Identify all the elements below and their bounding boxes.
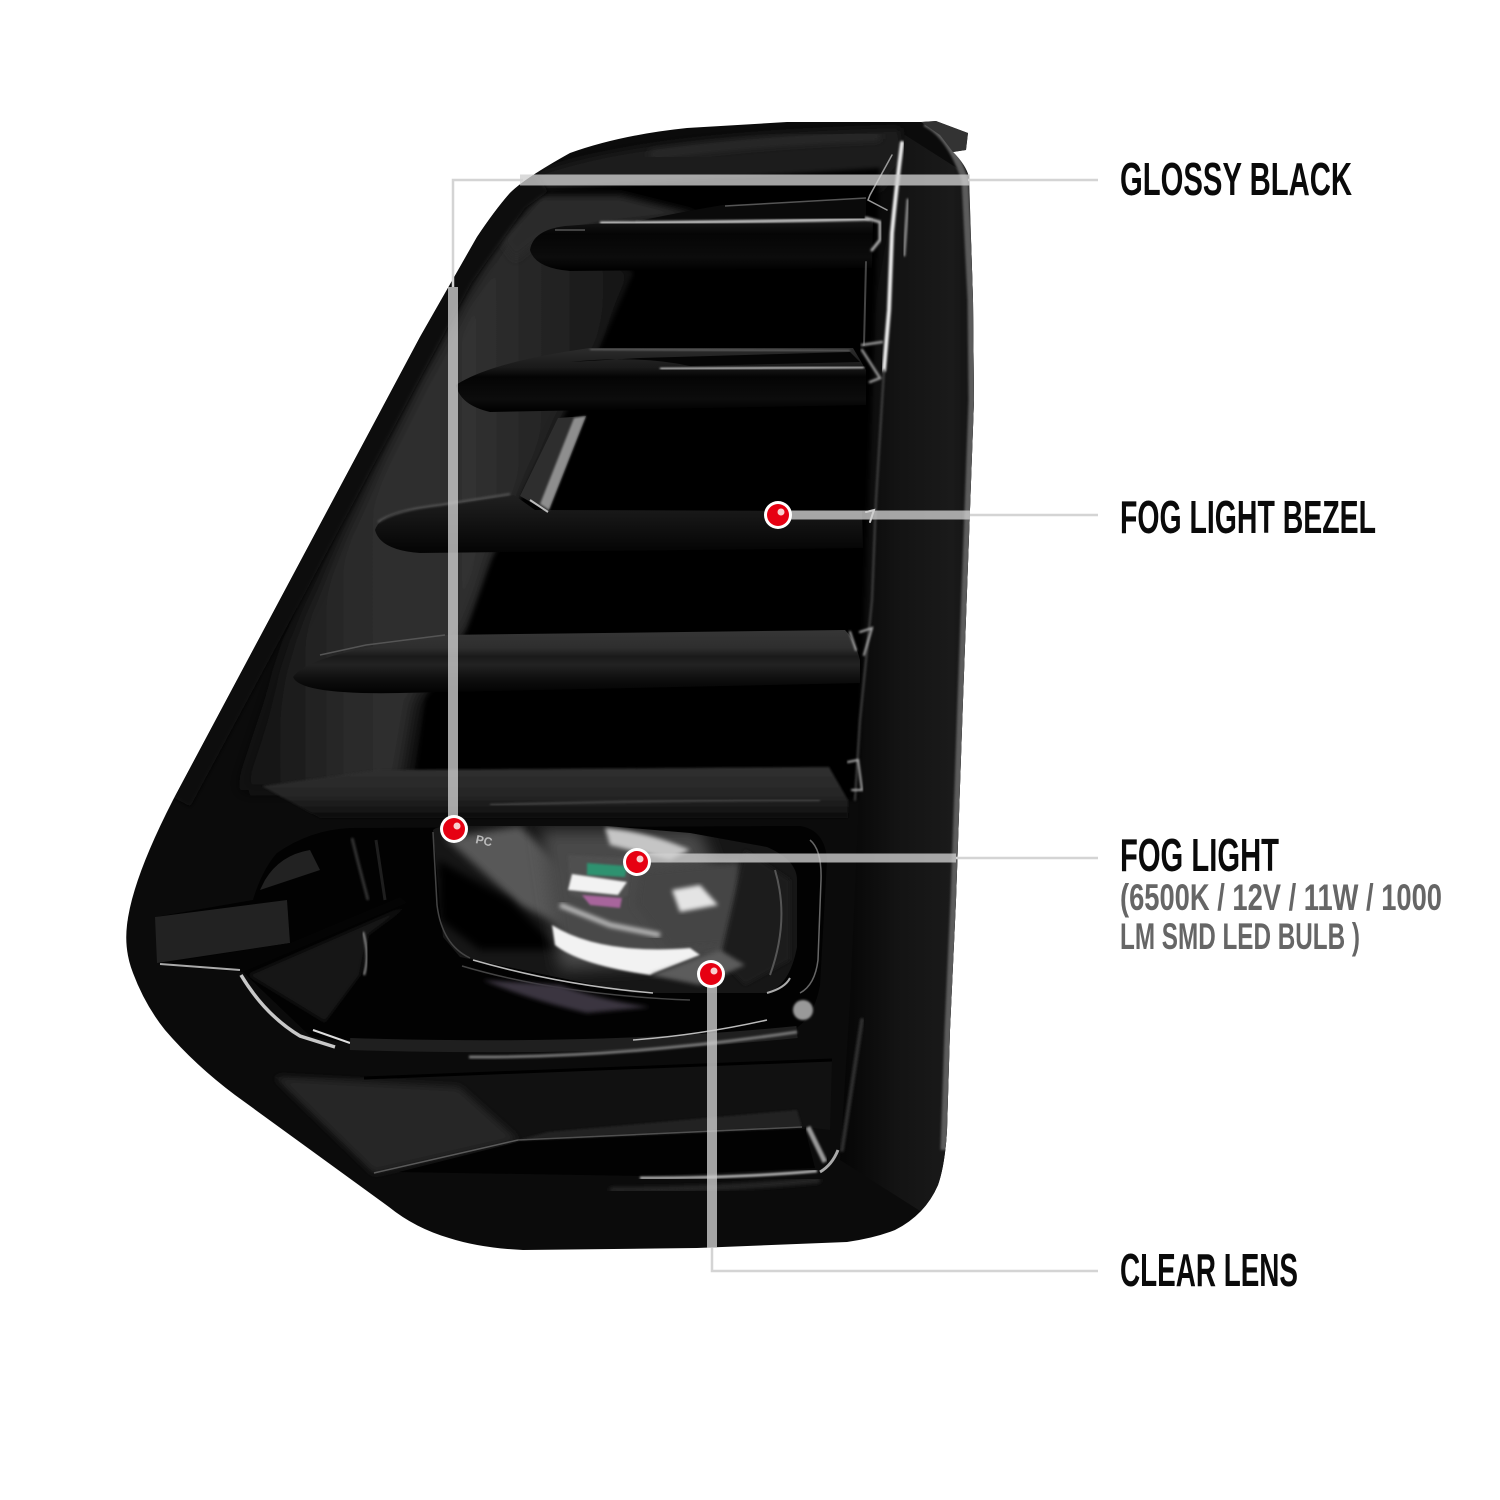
inner lip highlight	[633, 1020, 767, 1040]
louver slat 2	[456, 348, 866, 412]
fog light opening	[155, 826, 827, 1045]
gray gradient left of panel	[240, 225, 634, 790]
corner reflection	[793, 1000, 813, 1020]
chrome trim	[160, 964, 350, 1047]
lens lower reflection	[483, 980, 650, 1013]
product: fog light bezel assembly	[126, 121, 980, 1250]
fog lens	[433, 826, 797, 1000]
left block	[155, 900, 290, 963]
outer gray edge of the strip	[925, 123, 972, 1150]
right side strip	[896, 136, 974, 1212]
marker dot: fog light bezel	[764, 501, 792, 529]
marker dot: fog light	[623, 848, 651, 876]
lower interior sheen	[248, 906, 407, 1022]
label: fog light: FOG LIGHT	[1120, 829, 1279, 881]
upper louver black panel	[412, 168, 880, 800]
opening lower rim	[350, 1032, 797, 1046]
leader line: glossy black	[453, 180, 1098, 829]
marker dot: glossy black	[440, 815, 468, 843]
fog light specifications	[1120, 877, 1442, 957]
bezel silhouette	[126, 121, 974, 1250]
wedge above slat one	[506, 192, 690, 241]
label: glossy black: GLOSSY BLACK	[1120, 153, 1352, 205]
fog lens: PC	[474, 832, 494, 849]
rubber tab	[921, 121, 968, 152]
top band	[534, 128, 902, 188]
shaded surfaces clipped to the silhouette	[178, 121, 980, 1230]
opening upper gloss	[260, 838, 385, 900]
fog light specifications: LM SMD LED BULB )	[1120, 916, 1360, 957]
dark edge band	[178, 180, 540, 800]
right edge frame of louvers	[842, 143, 908, 1150]
leader line: fog light bezel	[778, 510, 1098, 520]
marker dot: clear lens	[697, 960, 725, 988]
top band streak	[650, 136, 880, 155]
right inner rim	[800, 840, 821, 993]
leader line: clear lens	[712, 974, 1098, 1271]
louver slat 5	[262, 767, 848, 818]
louver slat 1	[530, 218, 873, 271]
block blade	[158, 897, 407, 972]
glossy bezel tab	[520, 416, 586, 512]
leader line: fog light	[636, 854, 1098, 862]
interior gloss streak	[363, 932, 367, 975]
ridge above slat one	[620, 198, 866, 225]
rim highlight	[469, 1032, 797, 1057]
louver slat 3	[375, 494, 863, 553]
ridge highlight	[725, 198, 866, 206]
label: clear lens: CLEAR LENS	[1120, 1244, 1298, 1296]
louver slat 4	[293, 630, 860, 693]
lower band surfaces	[275, 1060, 838, 1190]
